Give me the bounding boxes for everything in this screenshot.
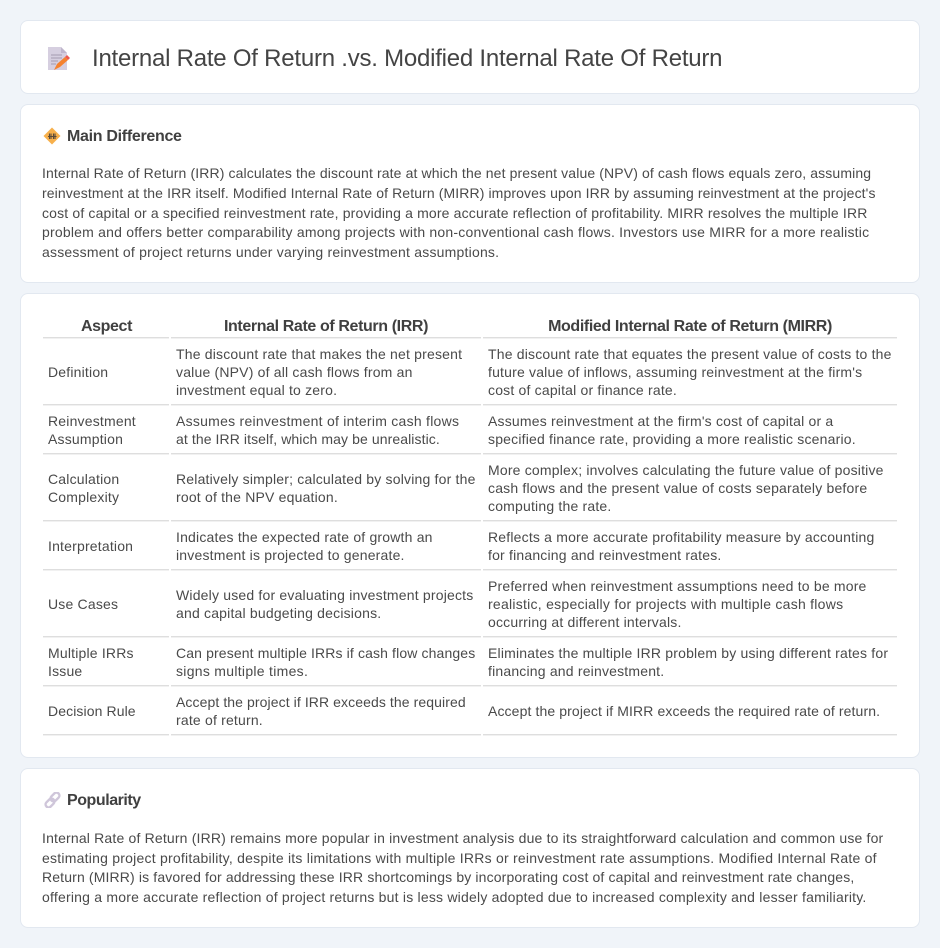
cell: reinvestment IRR: [176, 413, 459, 447]
row: multiple IRRs issue: Multiple IRRs: [48, 645, 134, 661]
table header: IRR: Internal Rate of Return (IRR): [224, 318, 428, 335]
cell: interpretation MIRR: for financing and reinvestment rates.: [488, 547, 721, 563]
cell: reinvestment MIRR: [488, 413, 856, 447]
cell: interpretation IRR: Indicates the expected rate of growth an: [176, 529, 433, 545]
cell: definition IRR: The discount rate that makes the net present: [176, 346, 462, 362]
row: multiple IRRs issue: Issue: [48, 663, 82, 679]
table header: aspect: Aspect: [81, 318, 132, 335]
row: multiple IRRs issue: [48, 645, 134, 679]
row: calculation complexity: [48, 471, 119, 505]
cell: use cases IRR: [176, 587, 473, 621]
row: reinvestment assumption: Reinvestment: [48, 413, 136, 429]
cell: complexity MIRR: [488, 462, 884, 514]
icon: warning diamond: [44, 128, 60, 144]
cell: multiple IRR: [176, 645, 475, 679]
panel: comparison table: [20, 293, 920, 758]
cell: reinvestment MIRR: specified finance rate, providing a more realistic scenario.: [488, 431, 856, 447]
cell: reinvestment MIRR: Assumes reinvestment at the firm's cost of capital or a: [488, 413, 833, 429]
row: decision rule: Decision Rule: [48, 703, 136, 719]
cell: complexity IRR: [176, 471, 476, 505]
text: main difference: Internal Rate of Return (IRR) calculates the discount rate at which the net present value (NPV) of cash flows equals zero, assuming: [42, 165, 871, 181]
cell: use cases MIRR: realistic, especially for projects with multiple cash flows: [488, 596, 843, 612]
panel: header: [20, 20, 920, 94]
row: interpretation: Interpretation: [48, 538, 133, 554]
cell: decision MIRR: Accept the project if MIRR exceeds the required rate of return.: [488, 703, 880, 719]
icon: chain link: [44, 792, 61, 808]
row: calculation complexity: Calculation: [48, 471, 119, 487]
text: popularity: estimating project profitability, despite its limitations with multiple IRRs or reinvestment rate assumptions. Modified Internal Rate of: [42, 850, 877, 866]
cell: definition MIRR: [488, 346, 892, 398]
cell: definition MIRR: The discount rate that equates the present value of costs to the: [488, 346, 892, 362]
text: main difference: [42, 165, 876, 260]
cell: interpretation MIRR: Reflects a more accurate profitability measure by accounting: [488, 529, 874, 545]
cell: reinvestment IRR: Assumes reinvestment of interim cash flows: [176, 413, 459, 429]
cell: definition MIRR: future value of inflows, assuming reinvestment at the firm's: [488, 364, 862, 380]
text: main difference: cost of capital or a specified reinvestment rate, providing a more accurate reflection of profitability. MIRR resolves the multiple IRR: [42, 205, 868, 221]
cell: use cases IRR: Widely used for evaluating investment projects: [176, 587, 473, 603]
cell: decision IRR: Accept the project if IRR exceeds the required: [176, 694, 466, 710]
cell: complexity MIRR: computing the rate.: [488, 498, 611, 514]
cell: multiple IRR: signs multiple times.: [176, 663, 308, 679]
text: popularity: [42, 830, 883, 905]
cell: definition IRR: [176, 346, 462, 398]
row: definition: Definition: [48, 364, 108, 380]
cell: complexity IRR: root of the NPV equation.: [176, 489, 338, 505]
text: main difference: problem and offers better comparability among projects with non-conventional cash flows. Investors use MIRR for a more realistic: [42, 224, 869, 240]
cell: definition IRR: value (NPV) of all cash flows from an: [176, 364, 413, 380]
title: Internal Rate Of Return .vs. Modified Internal Rate Of Return: [92, 45, 722, 72]
row: reinvestment assumption: Assumption: [48, 431, 123, 447]
cell: use cases MIRR: Preferred when reinvestment assumptions need to be more: [488, 578, 867, 594]
cell: use cases MIRR: occurring at different intervals.: [488, 614, 682, 630]
cell: decision IRR: rate of return.: [176, 712, 263, 728]
heading: popularity: Popularity: [67, 792, 141, 809]
cell: multiple IRR: Can present multiple IRRs if cash flow changes: [176, 645, 475, 661]
text: main difference: assessment of project returns under varying reinvestment assumptions.: [42, 244, 499, 260]
cell: complexity IRR: Relatively simpler; calculated by solving for the: [176, 471, 476, 487]
text: main difference: reinvestment at the IRR itself. Modified Internal Rate of Return (MIRR) improves upon IRR by assuming reinvestment at the project's: [42, 185, 876, 201]
cell: definition IRR: investment equal to zero.: [176, 382, 337, 398]
text: popularity: Return (MIRR) is favored for addressing these IRR shortcomings by incorporating cost of capital and reinvestment rate changes,: [42, 869, 854, 885]
heading: main difference: Main Difference: [67, 128, 182, 145]
cell: multiple MIRR: financing and reinvestment.: [488, 663, 664, 679]
text: popularity: offering a more accurate reflection of project returns but is less widely adopted due to increased complexity and lesser familiarity.: [42, 889, 867, 905]
row: use cases: Use Cases: [48, 596, 118, 612]
cell: interpretation IRR: investment is projected to generate.: [176, 547, 405, 563]
cell: multiple MIRR: Eliminates the multiple IRR problem by using different rates for: [488, 645, 888, 661]
panel: main difference: [20, 104, 920, 283]
icon: document with pencil: [48, 47, 70, 70]
row: calculation complexity: Complexity: [48, 489, 119, 505]
cell: complexity MIRR: More complex; involves calculating the future value of positive: [488, 462, 884, 478]
row: reinvestment assumption: [48, 413, 136, 447]
cell: definition MIRR: cost of capital or finance rate.: [488, 382, 677, 398]
cell: multiple MIRR: [488, 645, 888, 679]
cell: use cases MIRR: [488, 578, 867, 630]
table header: MIRR: Modified Internal Rate of Return (MIRR): [548, 318, 832, 335]
cell: use cases IRR: and capital budgeting decisions.: [176, 605, 381, 621]
cell: complexity MIRR: cash flows and the present value of costs separately before: [488, 480, 867, 496]
cell: interpretation IRR: [176, 529, 433, 563]
cell: reinvestment IRR: at the IRR itself, which may be unrealistic.: [176, 431, 440, 447]
panel: popularity: [20, 768, 920, 928]
text: popularity: Internal Rate of Return (IRR) remains more popular in investment analysis due to its straightforward calculation and common use for: [42, 830, 883, 846]
cell: decision IRR: [176, 694, 466, 728]
cell: interpretation MIRR: [488, 529, 874, 563]
